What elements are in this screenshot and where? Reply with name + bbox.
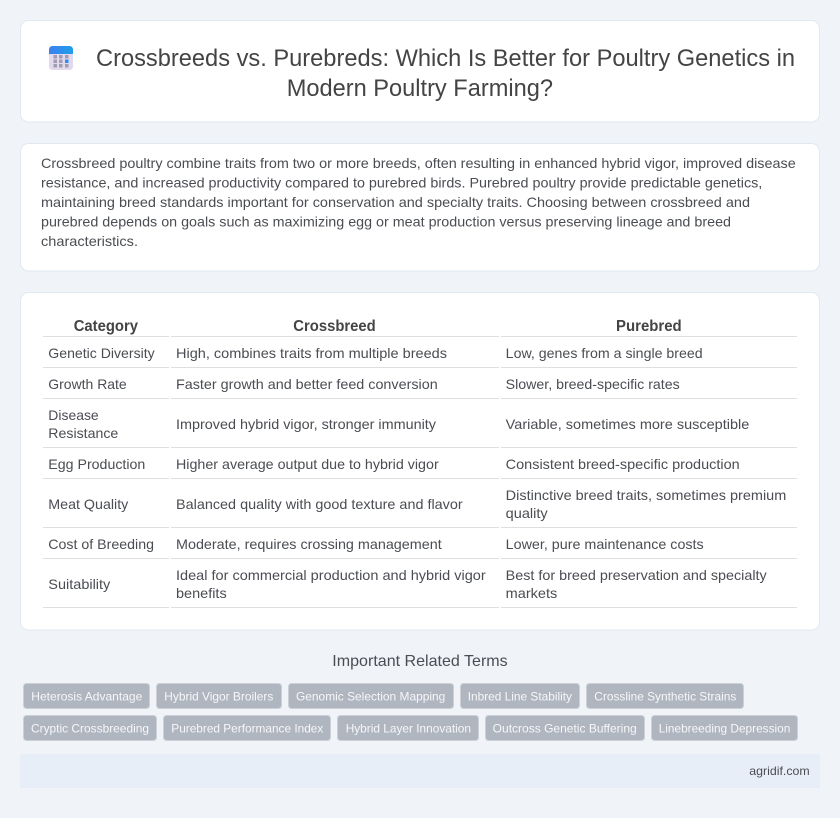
- tag: hybrid layer innovation: Hybrid Layer Innovation: [346, 721, 471, 735]
- tag: cryptic crossbreeding: Cryptic Crossbreeding: [31, 721, 149, 735]
- row: cost of breeding: Lower, pure maintenance costs: [506, 536, 704, 552]
- row: disease resistance: [48, 407, 750, 441]
- table header: Category: [74, 318, 138, 335]
- row: egg production: Egg Production: [48, 456, 145, 472]
- footer: [20, 754, 820, 788]
- footer: site name: agridif.com: [749, 764, 810, 778]
- row: genetic diversity: High, combines traits from multiple breeds: [176, 345, 447, 361]
- tag: inbred line stability: Inbred Line Stability: [468, 689, 572, 703]
- table header: [74, 318, 682, 335]
- tag: crossline synthetic strains: [586, 684, 744, 708]
- row: genetic diversity: [48, 345, 703, 361]
- text block: introduction: resistance, and increased productivity compared to purebred birds. Purebred poultry provide predictable genetics,: [41, 174, 762, 190]
- row: suitability: Ideal for commercial production and hybrid vigor: [176, 567, 486, 583]
- row: genetic diversity: Genetic Diversity: [48, 345, 155, 361]
- row: cost of breeding: Cost of Breeding: [48, 536, 154, 552]
- row: disease resistance: Improved hybrid vigor, stronger immunity: [176, 416, 436, 432]
- row: suitability: Suitability: [48, 576, 110, 592]
- text block: introduction: Crossbreed poultry combine traits from two or more breeds, often resulting in enhanced hybrid vigor, improved disease: [41, 155, 796, 171]
- panel: comparison table: [20, 292, 820, 630]
- title: Crossbreeds vs. Purebreds: Which Is Better for Poultry Genetics in: [96, 45, 795, 72]
- heading: related terms: Important Related Terms: [332, 653, 508, 670]
- row: meat quality: Distinctive breed traits, sometimes premium: [506, 487, 786, 503]
- row: meat quality: Balanced quality with good texture and flavor: [176, 496, 463, 512]
- row: disease resistance: Disease: [48, 407, 99, 423]
- row: egg production: Consistent breed-specific production: [506, 456, 740, 472]
- tag: linebreeding depression: Linebreeding Depression: [659, 721, 790, 735]
- title: [96, 45, 795, 102]
- tag: outcross genetic buffering: [486, 716, 644, 740]
- tag: purebred performance index: Purebred Performance Index: [171, 721, 323, 735]
- tag: purebred performance index: [164, 716, 330, 740]
- row: genetic diversity: Low, genes from a single breed: [506, 345, 703, 361]
- tag: heterosis advantage: Heterosis Advantage: [31, 689, 143, 703]
- row: suitability: [48, 567, 767, 601]
- text block: introduction: [41, 155, 796, 249]
- tag: cryptic crossbreeding: [24, 716, 156, 740]
- tag: hybrid layer innovation: [338, 716, 478, 740]
- tag: hybrid vigor broilers: [156, 684, 282, 708]
- row: growth rate: Slower, breed-specific rates: [506, 376, 680, 392]
- text block: introduction: purebred depends on goals such as maximizing egg or meat production versus preserving lineage and breed: [41, 214, 731, 230]
- row: suitability: Best for breed preservation and specialty: [506, 567, 767, 583]
- table header: Purebred: [616, 318, 682, 335]
- row: suitability: benefits: [176, 585, 227, 601]
- row: meat quality: [48, 487, 786, 521]
- tag: outcross genetic buffering: Outcross Genetic Buffering: [493, 721, 637, 735]
- tag: heterosis advantage: [24, 684, 150, 708]
- row: growth rate: Growth Rate: [48, 376, 127, 392]
- tag: hybrid vigor broilers: Hybrid Vigor Broilers: [164, 689, 273, 703]
- row: growth rate: [48, 376, 680, 392]
- row: meat quality: quality: [506, 505, 548, 521]
- row: suitability: markets: [506, 585, 557, 601]
- row: egg production: Higher average output due to hybrid vigor: [176, 456, 439, 472]
- text block: introduction: maintaining breed standards important for conservation and specialty traits. Choosing between crossbreed and: [41, 194, 750, 210]
- text block: introduction: characteristics.: [41, 233, 138, 249]
- tag: crossline synthetic strains: Crossline Synthetic Strains: [594, 689, 736, 703]
- title: Modern Poultry Farming?: [287, 75, 553, 102]
- tag: inbred line stability: [460, 684, 580, 708]
- table header: Crossbreed: [293, 318, 376, 335]
- panel: introduction: [20, 144, 820, 271]
- row: meat quality: Meat Quality: [48, 496, 128, 512]
- row: cost of breeding: Moderate, requires crossing management: [176, 536, 442, 552]
- icon: calendar: [49, 46, 73, 70]
- row: growth rate: Faster growth and better feed conversion: [176, 376, 438, 392]
- row: cost of breeding: [48, 536, 704, 552]
- row: disease resistance: Variable, sometimes more susceptible: [506, 416, 750, 432]
- tag: genomic selection mapping: Genomic Selection Mapping: [296, 689, 445, 703]
- panel: header: [20, 20, 820, 122]
- tag: genomic selection mapping: [288, 684, 454, 708]
- row: egg production: [48, 456, 740, 472]
- tags: related terms: [24, 684, 798, 740]
- tag: linebreeding depression: [652, 716, 798, 740]
- row: disease resistance: Resistance: [48, 425, 119, 441]
